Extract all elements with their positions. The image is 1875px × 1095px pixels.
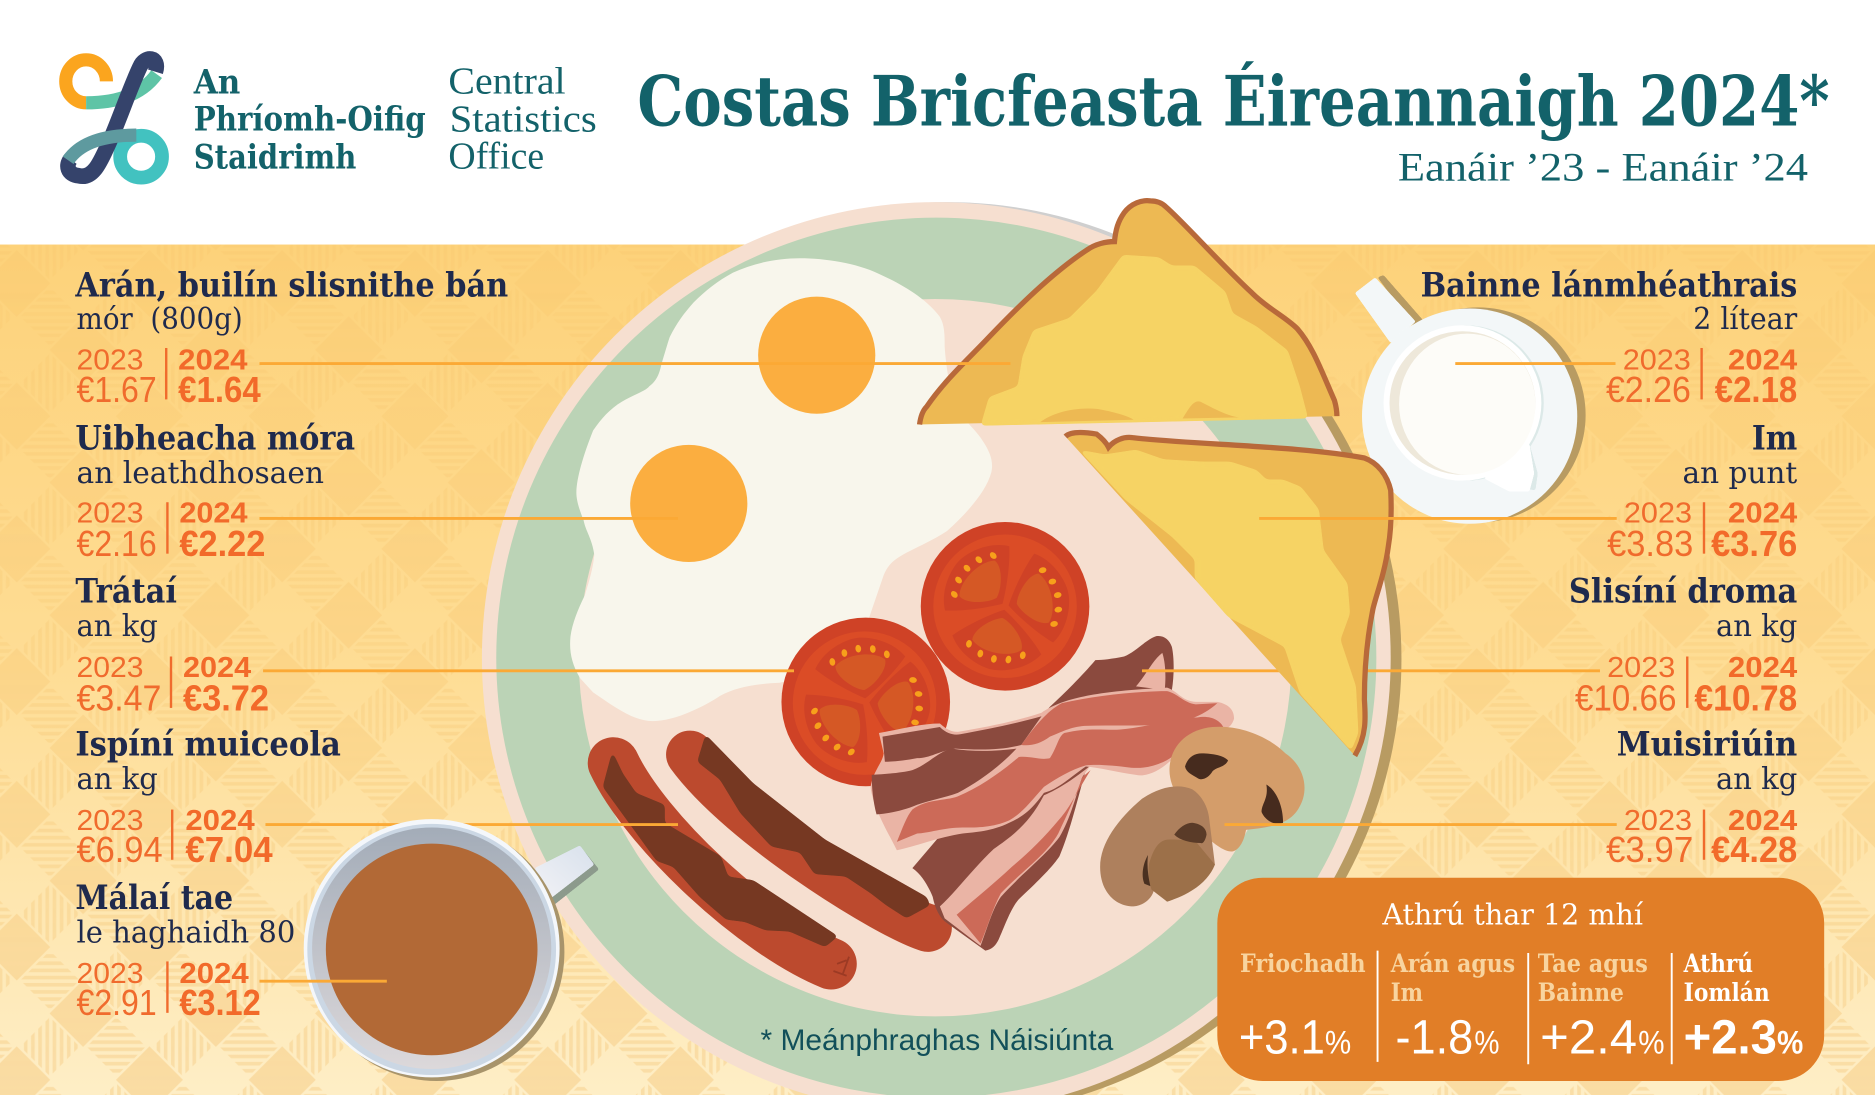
item: trátaí: Trátaí bbox=[75, 572, 177, 611]
column: athrú iomlán: Iomlán bbox=[1684, 977, 1770, 1007]
logo text: English: Office bbox=[448, 136, 544, 178]
item: uibheacha móra: 2023 bbox=[77, 498, 143, 530]
column: tae agus bainne bbox=[1538, 948, 1665, 1064]
item: trátaí: 2024 bbox=[183, 652, 251, 684]
item: málaí tae: le haghaidh 80 bbox=[77, 915, 295, 950]
item: bainne: 2024 bbox=[1728, 345, 1797, 377]
item: málaí tae: €2.91 bbox=[77, 983, 157, 1023]
egg yolk 1 bbox=[758, 297, 875, 414]
item: uibheacha móra: €2.16 bbox=[77, 524, 157, 564]
leader line: trátaí bbox=[263, 670, 794, 672]
column: tae agus bainne: +2.4 bbox=[1540, 1011, 1637, 1064]
column: friochadh: +3.1 bbox=[1239, 1011, 1325, 1064]
column: friochadh bbox=[1239, 948, 1366, 1064]
column: arán agus im: Im bbox=[1391, 977, 1423, 1007]
item: ispíní muiceola: 2024 bbox=[185, 805, 255, 837]
item: uibheacha móra: an leathdhosaen bbox=[77, 456, 324, 491]
egg yolk 2 bbox=[630, 445, 747, 562]
column: arán agus im: Arán agus bbox=[1390, 948, 1515, 978]
item: trátaí: €3.72 bbox=[183, 678, 269, 718]
sausages bbox=[603, 734, 930, 976]
column: friochadh: % bbox=[1325, 1024, 1351, 1060]
item: bainne: €2.26 bbox=[1606, 370, 1691, 410]
logo text: English bbox=[448, 60, 597, 178]
panel: 12-month change bbox=[1217, 878, 1824, 1081]
item: bainne: Bainne lánmhéathrais bbox=[1421, 266, 1797, 305]
item: arán: 2023 bbox=[77, 345, 143, 377]
footnote: * Meánphraghas Náisiúnta bbox=[761, 1024, 1114, 1057]
logo text: Irish: Staidrimh bbox=[194, 138, 356, 177]
leader line: slisíní droma bbox=[1142, 670, 1600, 672]
leader line: málaí tae bbox=[259, 980, 387, 982]
item: slisíní droma: Slisíní droma bbox=[1569, 572, 1797, 611]
column: athrú iomlán: Athrú bbox=[1683, 948, 1753, 978]
item: bainne: 2023 bbox=[1623, 345, 1691, 377]
subtitle: Eanáir ’23 - Eanáir ’24 bbox=[1398, 145, 1808, 190]
item: ispíní muiceola: 2023 bbox=[77, 805, 143, 837]
item: ispíní muiceola: an kg bbox=[77, 762, 158, 797]
item: arán bbox=[74, 266, 508, 410]
toast slice bottom bbox=[1065, 433, 1391, 756]
logo text: Irish bbox=[193, 62, 426, 177]
logo text: English: Statistics bbox=[450, 99, 597, 141]
milk jug bbox=[1355, 275, 1586, 524]
item: muisiriúin: €3.97 bbox=[1606, 830, 1693, 870]
panel heading: Athrú thar 12 mhí bbox=[1381, 897, 1644, 931]
item: ispíní muiceola bbox=[75, 725, 341, 870]
item: im: 2024 bbox=[1728, 498, 1797, 530]
item: im: an punt bbox=[1682, 456, 1797, 491]
item: slisíní droma: an kg bbox=[1716, 609, 1797, 644]
logo mark bbox=[66, 59, 162, 178]
toast slice top bbox=[917, 201, 1338, 426]
item: trátaí: an kg bbox=[77, 609, 158, 644]
leader line: arán bbox=[259, 362, 1010, 365]
tablecloth background bbox=[0, 245, 1875, 1095]
tomato slice left bbox=[781, 618, 950, 786]
sausage left bbox=[603, 751, 849, 976]
item: ispíní muiceola: €6.94 bbox=[77, 830, 163, 870]
column: athrú iomlán: % bbox=[1777, 1024, 1803, 1060]
logo text: Irish: An bbox=[193, 62, 240, 101]
plate shadow bbox=[939, 202, 1402, 1095]
item: muisiriúin: 2024 bbox=[1728, 805, 1797, 837]
leader line: muisiriúin bbox=[1224, 823, 1617, 826]
back rasher bbox=[912, 636, 1174, 951]
column: arán agus im: % bbox=[1474, 1024, 1500, 1060]
item: slisíní droma bbox=[1569, 572, 1797, 718]
item: uibheacha móra: €2.22 bbox=[179, 524, 265, 564]
item: málaí tae: €3.12 bbox=[179, 983, 261, 1023]
bacon rashers bbox=[871, 636, 1234, 951]
tea surface bbox=[326, 844, 538, 1055]
item: uibheacha móra: Uibheacha móra bbox=[75, 419, 355, 458]
item: im: €3.76 bbox=[1711, 524, 1797, 564]
item: trátaí bbox=[75, 572, 269, 718]
column: arán agus im: -1.8 bbox=[1395, 1011, 1473, 1064]
item: muisiriúin: an kg bbox=[1716, 762, 1797, 797]
fried eggs bbox=[570, 258, 992, 721]
logo text: Irish: Phríomh-Oifig bbox=[194, 99, 426, 138]
mushrooms bbox=[1100, 727, 1305, 906]
item: arán: 2024 bbox=[178, 345, 248, 377]
item: uibheacha móra bbox=[75, 419, 355, 564]
item: im: Im bbox=[1752, 419, 1797, 458]
column: arán agus im bbox=[1390, 948, 1515, 1064]
leader line: ispíní muiceola bbox=[265, 823, 678, 826]
tomato slices bbox=[781, 522, 1089, 786]
column: tae agus bainne: % bbox=[1638, 1024, 1665, 1060]
column: tae agus bainne: Tae agus bbox=[1538, 948, 1648, 978]
item: málaí tae: 2023 bbox=[77, 958, 143, 990]
item: slisíní droma: €10.66 bbox=[1575, 678, 1676, 718]
item: trátaí: €3.47 bbox=[77, 678, 161, 718]
column: friochadh: Friochadh bbox=[1240, 948, 1366, 978]
item: ispíní muiceola: €7.04 bbox=[185, 830, 273, 870]
item: málaí tae: 2024 bbox=[179, 958, 249, 990]
plate bbox=[482, 202, 1391, 1095]
front rasher bbox=[871, 688, 1234, 850]
item: málaí tae bbox=[75, 878, 295, 1023]
logo bbox=[66, 59, 597, 178]
leader line: bainne bbox=[1455, 362, 1616, 365]
item: arán: €1.67 bbox=[77, 370, 157, 410]
item: muisiriúin: €4.28 bbox=[1711, 830, 1797, 870]
cup of tea bbox=[304, 819, 599, 1081]
item: im: €3.83 bbox=[1607, 524, 1693, 564]
item: slisíní droma: 2024 bbox=[1728, 652, 1797, 684]
item: arán: mór (800g) bbox=[77, 302, 243, 337]
item: im bbox=[1607, 419, 1797, 564]
column: tae agus bainne: Bainne bbox=[1538, 977, 1624, 1007]
leader line: uibheacha bbox=[259, 517, 678, 520]
mushroom lower bbox=[1100, 786, 1215, 906]
item: bainne: 2 lítear bbox=[1693, 302, 1798, 337]
item: málaí tae: Málaí tae bbox=[75, 878, 233, 917]
tomato slice right bbox=[921, 522, 1089, 691]
item: slisíní droma: 2023 bbox=[1607, 652, 1675, 684]
item: uibheacha móra: 2024 bbox=[179, 498, 248, 530]
item: slisíní droma: €10.78 bbox=[1694, 678, 1797, 718]
item: bainne: €2.18 bbox=[1715, 370, 1797, 410]
item: muisiriúin: Muisiriúin bbox=[1617, 725, 1797, 764]
leader line: im bbox=[1259, 517, 1617, 520]
logo text: English: Central bbox=[448, 60, 566, 102]
column: athrú iomlán: +2.3 bbox=[1684, 1011, 1777, 1064]
item: ispíní muiceola: Ispíní muiceola bbox=[75, 725, 341, 764]
column: athrú iomlán bbox=[1683, 948, 1803, 1064]
sausage right bbox=[690, 734, 930, 928]
item: muisiriúin: 2023 bbox=[1624, 805, 1692, 837]
mushroom upper bbox=[1169, 727, 1305, 852]
header background bbox=[0, 0, 1875, 245]
item: im: 2023 bbox=[1624, 498, 1692, 530]
item: arán: €1.64 bbox=[178, 370, 261, 410]
item: arán: Arán, builín slisnithe bán bbox=[74, 266, 508, 305]
item: trátaí: 2023 bbox=[77, 652, 143, 684]
item: muisiriúin bbox=[1606, 725, 1797, 870]
item: bainne bbox=[1421, 266, 1798, 410]
